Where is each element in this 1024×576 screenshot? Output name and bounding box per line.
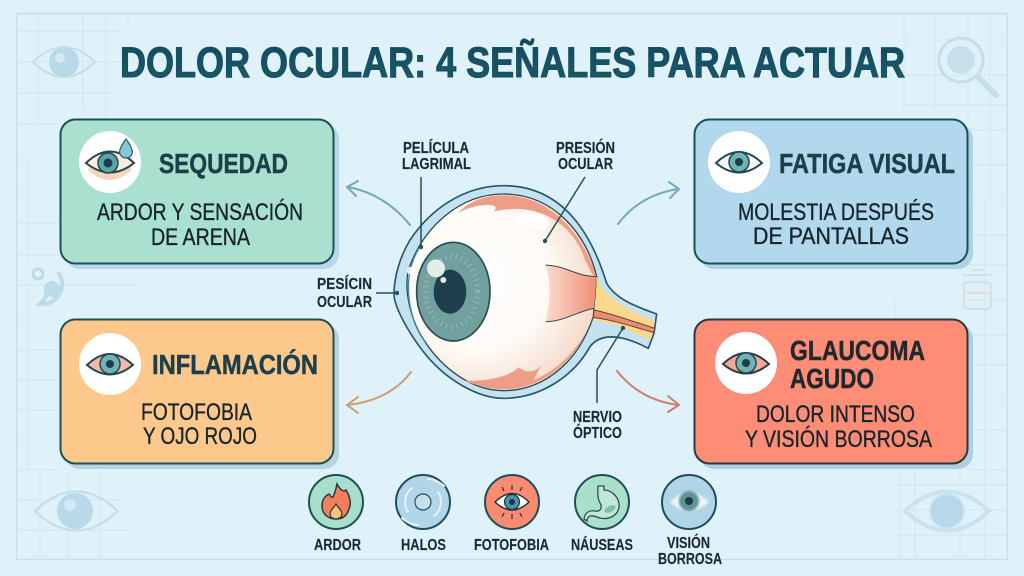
sclera highlight	[514, 208, 552, 234]
decorative icon: magnifier	[939, 38, 996, 95]
iris fibres	[426, 256, 478, 327]
heading: FATIGA VISUAL	[779, 148, 955, 179]
arrow: to inflamacion	[347, 372, 411, 413]
text block: DOLOR INTENSO	[756, 401, 915, 428]
panel: glaucoma agudo	[694, 320, 973, 469]
label: VISIÓN	[667, 534, 710, 552]
decorative icon: right cup	[962, 270, 993, 309]
heading	[790, 335, 925, 394]
text block: MOLESTIA DESPUÉS	[738, 199, 934, 226]
text block: FOTOFOBIA	[141, 399, 252, 426]
label: nervio optico: ÓPTICO	[573, 424, 622, 442]
label: pelicula lagrimal: PELÍCULA	[403, 140, 469, 157]
decorative icon: eye bottom left	[35, 492, 118, 530]
cornea	[408, 247, 425, 342]
icon: dry eye with tear	[79, 131, 141, 193]
label: FOTOFOBIA	[474, 537, 549, 554]
nerve core	[593, 310, 655, 333]
panel: inflamacion	[60, 320, 339, 469]
decorative icon: left drop	[33, 269, 62, 304]
label: presion ocular	[543, 139, 615, 243]
pupil	[434, 270, 466, 314]
decorative icon: blurred eye bottom right	[905, 492, 989, 530]
label: pesicin ocular: OCULAR	[317, 294, 372, 311]
panel: sequedad	[60, 120, 339, 269]
label: NÁUSEAS	[571, 537, 633, 554]
heading: AGUDO	[790, 363, 874, 394]
iris highlight	[427, 259, 445, 277]
small highlight	[440, 277, 446, 283]
text block	[141, 399, 257, 450]
text block	[738, 199, 934, 250]
label: pelicula lagrimal: LAGRIMAL	[402, 156, 471, 173]
icon: flame	[309, 475, 363, 529]
outer shell	[394, 186, 657, 398]
heading: INFLAMACIÓN	[152, 349, 318, 380]
iris	[417, 242, 490, 341]
symptom: vision borrosa	[658, 475, 722, 568]
heading: SEQUEDAD	[159, 148, 288, 179]
optic nerve	[593, 277, 655, 341]
label: HALOS	[401, 537, 446, 554]
eye anatomy diagram	[394, 186, 657, 398]
icon: tired eye	[708, 131, 770, 193]
text block: DE ARENA	[151, 224, 250, 251]
label: ARDOR	[314, 537, 361, 554]
icon: light-sensitive eye	[485, 475, 539, 529]
label: pelicula lagrimal	[402, 140, 471, 249]
arrow: to glaucoma	[617, 371, 679, 412]
label: BORROSA	[658, 551, 722, 568]
icon: red eye	[715, 332, 777, 394]
label	[658, 534, 722, 568]
arrow: to sequedad	[347, 181, 410, 225]
text block: DE PANTALLAS	[753, 223, 909, 250]
label: presion ocular: OCULAR	[558, 156, 613, 173]
text block	[97, 199, 303, 251]
top choroid crescent	[458, 195, 596, 276]
icon: halos	[396, 475, 450, 529]
arrow: to fatiga visual	[618, 182, 679, 224]
text block: Y OJO ROJO	[143, 423, 257, 450]
optic disc edges	[546, 265, 597, 322]
eyeball body	[407, 194, 597, 391]
icon: inflamed eye	[79, 333, 141, 395]
text block	[745, 401, 932, 453]
panel: fatiga visual	[694, 120, 973, 269]
decorative icon: eye top left	[33, 47, 95, 77]
label: pesicin ocular	[317, 276, 399, 311]
label: presion ocular: PRESIÓN	[556, 139, 615, 157]
text block: Y VISIÓN BORROSA	[745, 426, 932, 453]
label: nervio optico: NERVIO	[573, 409, 622, 426]
heading: GLAUCOMA	[790, 335, 925, 366]
symptom: fotofobia	[474, 475, 549, 554]
label: nervio optico	[573, 326, 625, 442]
bottom choroid crescent	[463, 318, 592, 389]
text block: ARDOR Y SENSACIÓN	[97, 199, 303, 226]
cornea glint	[407, 267, 415, 275]
icon: blurred eye	[662, 475, 716, 529]
optic disc fan	[546, 265, 597, 322]
symptom: ardor	[309, 475, 363, 554]
symptom: nauseas	[571, 475, 633, 554]
symptom: halos	[396, 475, 450, 554]
icon: stomach	[575, 475, 629, 529]
label: pesicin ocular: PESÍCIN	[317, 276, 372, 293]
